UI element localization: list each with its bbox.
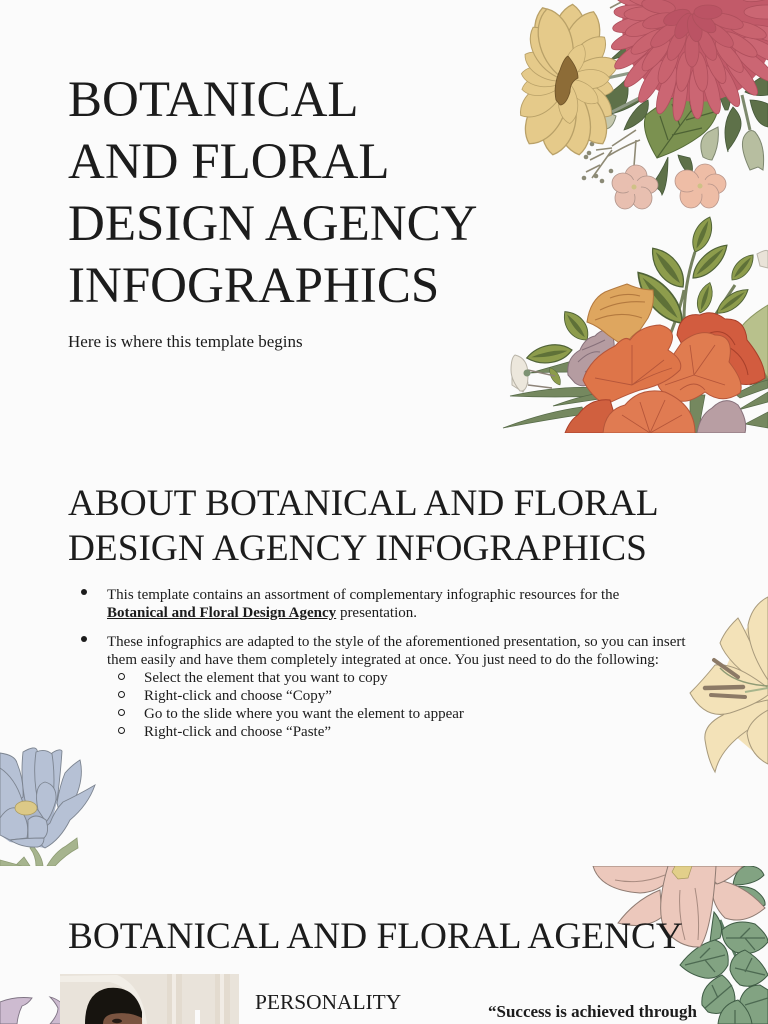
title: BOTANICAL	[68, 72, 359, 128]
illustration: lilac flower bottom left of third slide	[0, 996, 60, 1024]
bullet 2	[81, 634, 686, 668]
quote: “Success is achieved through	[488, 1002, 697, 1021]
heading: about	[68, 483, 659, 569]
illustration: pink lily and leaves top right of third slide	[593, 866, 768, 1024]
illustration: top bouquet with sunflower and chrysanthemum	[513, 0, 768, 209]
bullet 2: them easily and have them completely integrated at once. You just need to do the following:	[107, 652, 659, 668]
green buds	[595, 114, 764, 170]
subtitle: Here is where this template begins	[68, 332, 303, 351]
photo of a person	[60, 974, 239, 1024]
title: DESIGN AGENCY	[68, 196, 477, 252]
title	[68, 72, 477, 314]
bullet 1: Botanical and Floral Design Agency presentation.	[107, 605, 417, 621]
chrysanthemum	[609, 0, 768, 122]
orange bloom bottom	[603, 391, 695, 433]
flower centre	[15, 801, 37, 815]
grass blades and stems	[502, 362, 768, 433]
sunflower	[520, 4, 616, 156]
lily stamens	[705, 660, 768, 697]
bullet list	[81, 587, 686, 740]
peach rose	[587, 284, 653, 347]
small pink blossom left	[612, 165, 658, 209]
sub-list steps	[118, 670, 464, 740]
bullet 1: This template contains an assortment of complementary infographic resources for the	[107, 587, 619, 603]
sunflower centre	[555, 56, 578, 105]
sub-list steps: Go to the slide where you want the element to appear	[144, 706, 464, 722]
orange bloom left	[583, 325, 681, 405]
illustration: lower bouquet with orange blooms	[503, 214, 768, 433]
illustration: yellow lily at right edge	[690, 597, 768, 772]
white bud top right	[757, 250, 768, 268]
dark orange bloom bottom left	[565, 400, 620, 433]
olive leaves	[525, 214, 768, 387]
heading: agency: BOTANICAL AND FLORAL AGENCY	[68, 916, 683, 957]
sub-list steps: Right-click and choose “Copy”	[144, 688, 332, 704]
leaf veins	[685, 928, 768, 1024]
round green leaves	[680, 866, 768, 1024]
sub-list steps: Right-click and choose “Paste”	[144, 724, 331, 740]
title: INFOGRAPHICS	[68, 258, 439, 314]
orange bloom centre	[657, 333, 741, 401]
bullet 2: These infographics are adapted to the style of the aforementioned presentation, so you can insert	[107, 634, 686, 650]
illustration: blue flower bottom left of second slide	[0, 748, 95, 866]
twigs and white carnation	[511, 355, 555, 392]
sub-list steps: Select the element that you want to copy	[144, 670, 388, 686]
big green leaf	[644, 98, 718, 159]
title: AND FLORAL	[68, 134, 390, 190]
bullet 1	[81, 587, 619, 621]
mauve carnation bottom	[697, 401, 746, 433]
light fern leaf	[742, 304, 768, 378]
heading: about: ABOUT BOTANICAL AND FLORAL	[68, 483, 659, 524]
lily anthers	[672, 866, 692, 879]
personality label: PERSONALITY	[255, 990, 401, 1014]
small pink blossom right	[675, 164, 726, 208]
heading: about: DESIGN AGENCY INFOGRAPHICS	[68, 528, 647, 569]
red bloom behind	[677, 313, 765, 385]
mauve carnation	[568, 330, 614, 386]
